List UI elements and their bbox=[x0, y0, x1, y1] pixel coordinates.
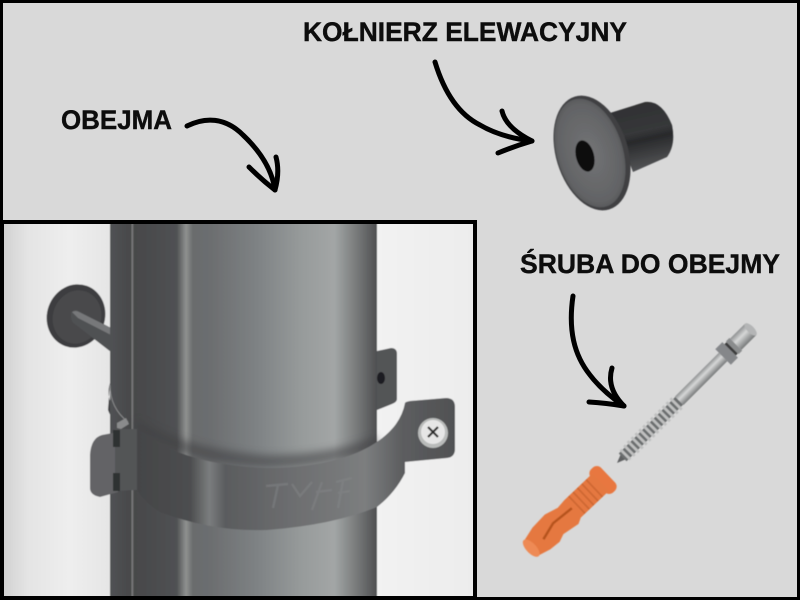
screw head bbox=[418, 418, 448, 448]
clamp shadow on pipe bbox=[137, 420, 377, 468]
arrow: kołnierz elewacyjny bbox=[435, 62, 532, 153]
panel frame bbox=[2, 222, 475, 598]
band logo bbox=[266, 478, 352, 510]
arrow: obejma bbox=[187, 120, 278, 190]
clamp band bbox=[137, 403, 405, 530]
clamp rear edge on pipe bbox=[110, 385, 128, 422]
icon: wall collar bbox=[540, 86, 673, 220]
heading: OBEJMA: OBEJMA bbox=[61, 105, 172, 135]
arrow: śruba do obejmy bbox=[571, 296, 624, 406]
heading: ŚRUBA DO OBEJMY: ŚRUBA DO OBEJMY bbox=[520, 248, 780, 279]
icon: hanger bolt bbox=[609, 319, 761, 471]
panel: pipe clamp photo bbox=[2, 222, 475, 598]
downpipe bbox=[110, 222, 377, 598]
heading: KOŁNIERZ ELEWACYJNY: KOŁNIERZ ELEWACYJNY bbox=[303, 17, 627, 47]
rear clamp band and tab bbox=[108, 348, 397, 430]
wall background bbox=[2, 222, 475, 598]
clamp hinge bbox=[113, 418, 137, 491]
wall flange with rod bbox=[38, 276, 114, 356]
left clamp tab bbox=[90, 432, 118, 497]
icon: orange wall plug bbox=[517, 464, 619, 563]
right clamp tab bbox=[405, 398, 455, 462]
